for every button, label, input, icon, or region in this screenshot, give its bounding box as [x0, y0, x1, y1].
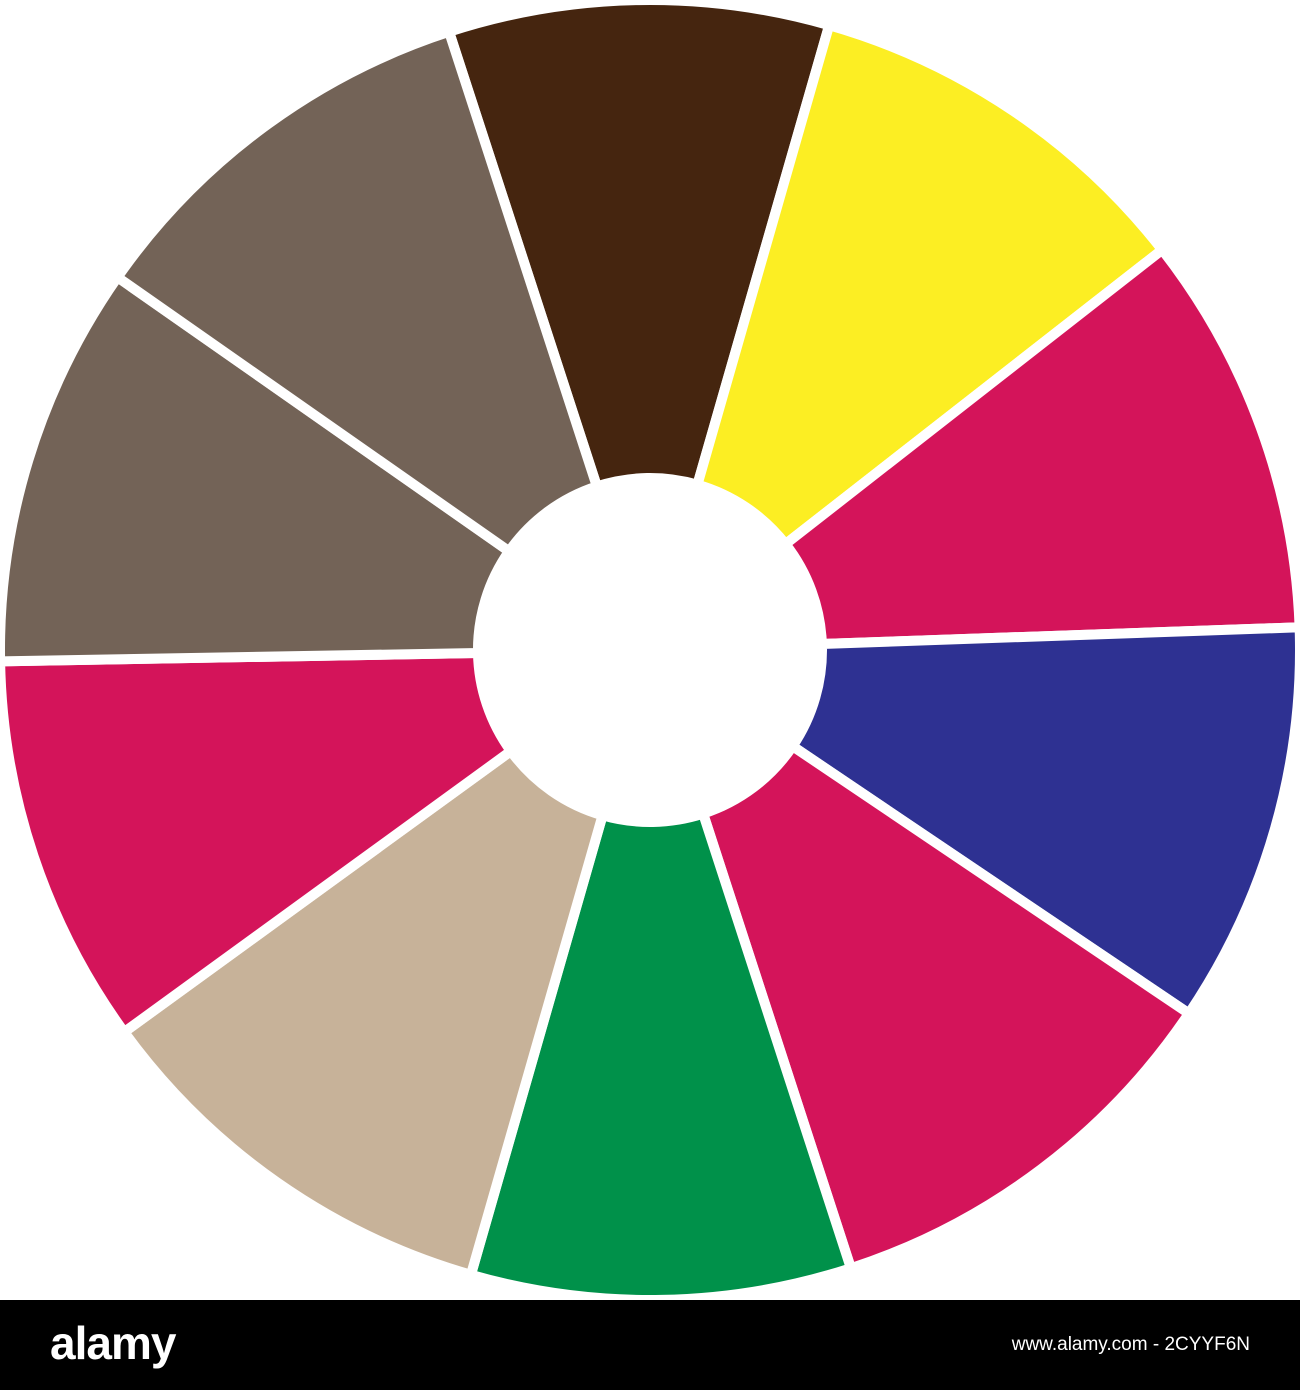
footer logo: alamy [50, 1317, 175, 1369]
segment: gray (upper left) [118, 32, 597, 551]
segment: green [471, 814, 851, 1300]
segment: magenta (right upper) [786, 250, 1300, 644]
segment: magenta (left) [0, 653, 511, 1032]
segment: tan [124, 751, 603, 1275]
footer reference text: www.alamy.com - 2CYYF6N [1012, 1334, 1250, 1355]
segment: magenta (lower right) [703, 746, 1189, 1268]
segment: blue [793, 627, 1300, 1014]
segment: gray (left) [0, 277, 509, 661]
segment: dark brown (top) [449, 0, 829, 486]
segment: yellow [697, 25, 1162, 544]
footer bar [0, 1300, 1300, 1390]
